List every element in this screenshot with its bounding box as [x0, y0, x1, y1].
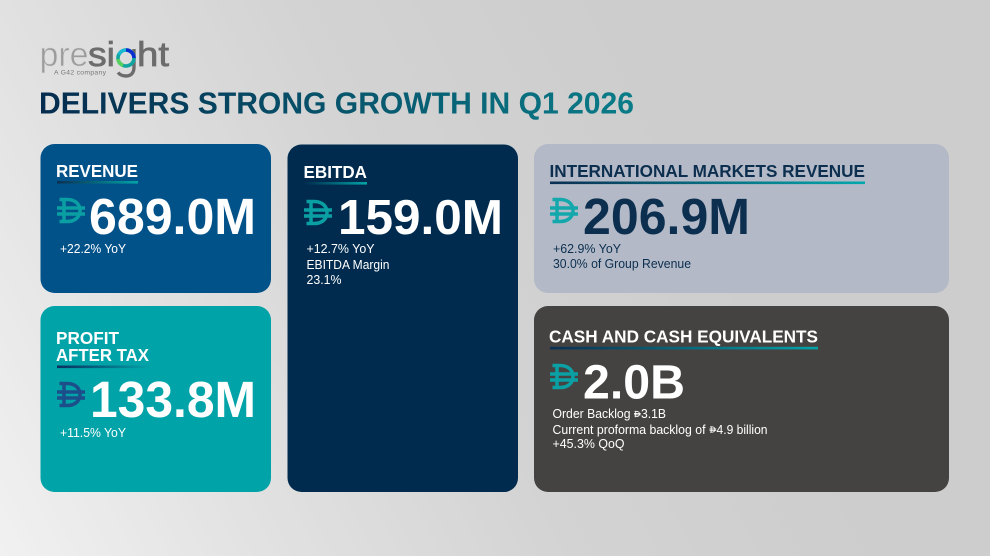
panel: revenue — [40, 144, 271, 293]
cash details: 4.9 billion — [716, 423, 768, 437]
revenue value: 689.0M — [89, 188, 256, 245]
panel: cash and cash equivalents — [534, 306, 949, 492]
cash details: Order Backlog — [552, 407, 630, 421]
heading: profit after tax: AFTER TAX — [56, 345, 149, 365]
revenue change: +22.2% YoY — [60, 242, 127, 256]
ebitda details: EBITDA Margin — [306, 258, 390, 272]
heading: profit after tax — [56, 328, 149, 365]
profit value: 133.8M — [90, 371, 256, 428]
panel: ebitda — [288, 144, 518, 492]
logo: presight: ht — [137, 36, 170, 74]
ebitda value: 159.0M — [338, 191, 503, 245]
cash details: +45.3% QoQ — [552, 437, 625, 451]
heading: profit after tax: PROFIT — [56, 328, 119, 348]
international details — [553, 242, 691, 271]
international details: 30.0% of Group Revenue — [553, 257, 691, 271]
heading: ebitda: EBITDA — [304, 162, 367, 182]
cash details: 3.1B — [641, 407, 666, 421]
icon: dirham symbol — [550, 200, 578, 222]
cash details — [552, 407, 768, 451]
international details: +62.9% YoY — [553, 242, 622, 256]
logo: presight: pre — [40, 36, 88, 74]
icon: dirham symbol — [550, 366, 578, 388]
icon: dirham symbol — [57, 384, 85, 406]
ebitda details: +12.7% YoY — [306, 242, 375, 256]
cash details: Current proforma backlog of — [552, 423, 706, 437]
icon: dirham symbol — [57, 200, 85, 222]
panel: profit after tax — [40, 306, 271, 492]
panel: international markets revenue — [534, 144, 949, 293]
heading: international markets revenue: INTERNATIONAL MARKETS REVENUE — [550, 161, 865, 181]
logo: presight: A G42 company — [54, 70, 107, 76]
international value: 206.9M — [583, 188, 750, 245]
ebitda details — [306, 242, 390, 287]
cash value: 2.0B — [583, 356, 685, 410]
logo: presight: si — [88, 36, 115, 74]
logo: presight — [40, 36, 170, 76]
heading: revenue: REVENUE — [56, 161, 138, 181]
heading: cash and cash equivalents: CASH AND CASH EQUIVALENTS — [549, 326, 818, 346]
icon: dirham symbol — [304, 202, 332, 224]
profit change: +11.5% YoY — [60, 426, 127, 440]
ebitda details: 23.1% — [306, 273, 342, 287]
title: DELIVERS STRONG GROWTH IN Q1 2026 — [39, 86, 634, 120]
